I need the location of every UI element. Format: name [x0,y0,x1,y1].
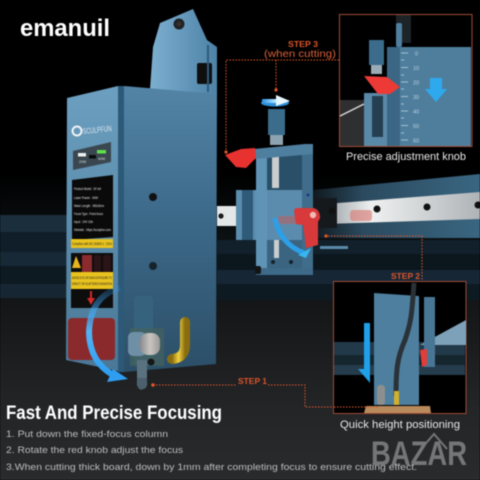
instruction text block: 3.When cutting thick board, down by 1mm after completing focus to ensure cutting effect. [6,462,417,473]
icon: blue down arrow [425,78,447,102]
blue rotate arrow on body [89,288,128,382]
callout: step 1: STEP 1 [238,376,267,386]
logo: SCULPFUN [72,124,112,136]
red knob and blue rotate arrow on carriage [275,208,320,258]
icon: blue rotate arrow on knob [261,95,290,106]
gantry beam with linear rail [217,174,480,240]
power switch panel: 20W [79,160,87,164]
top adjustment knob [243,109,313,159]
extrusion rails background [0,215,480,300]
ruler scale: 60 [413,138,419,144]
warning labels [71,253,113,308]
spec label [72,175,113,240]
ruler scale: 50 [413,124,419,130]
spec label: Website : https://sculpfun.com [74,227,111,232]
gold handle [172,322,185,359]
spec label: Laser Power : 40W [74,195,98,200]
heading: Fast And Precise Focusing [6,402,222,424]
yellow compliance strip [71,239,113,248]
icon: red adjustment knob [364,76,400,94]
icon: blue down arrow [358,323,370,383]
warning labels: DIRECT OR SCATTERED RADIATION [72,282,112,286]
ruler scale: 40 [413,110,419,116]
spec label: Focus Type : Fixed-focus [74,211,103,216]
caption: quick height positioning: Quick height positioning [340,419,460,431]
spec label: Input : 24V 10A [74,219,93,224]
ruler scale: 0 [415,52,418,58]
panel: quick height positioning [334,282,466,414]
laser module body [66,86,217,372]
spec label: Wave Length : 450±5nm [74,203,104,208]
vertical slide carriage [255,152,348,275]
instruction text block [6,429,417,473]
panel: precise adjustment knob [340,14,472,146]
warning labels: AVOID EYE OR SKIN EXPOSURE TO [72,276,112,280]
brand text: emanuil: emanuil [20,15,110,42]
spec label: Product Model : SF-A9 [74,186,102,191]
power switch panel: 40W [98,157,106,161]
callout: step 3: STEP 3 [288,39,318,49]
power switch panel [73,142,111,170]
callout: step 3: (when cutting) [264,49,336,60]
focus bracket and knob [128,296,164,390]
ruler scale [401,52,419,144]
red window [68,318,115,360]
caption: precise adjustment knob: Precise adjustment knob [346,151,466,163]
yellow compliance strip: Complies with IEC 60825-1 : 2014 [72,242,112,246]
callout: step 1 [151,376,333,407]
instruction text block: 1. Put down the fixed-focus column [6,429,168,440]
instruction text block: 2. Rotate the red knob adjust the focus [6,445,183,456]
callout: step 3 [224,39,339,154]
fin: top bracket of laser module [150,9,217,95]
callout: step 2: STEP 2 [391,271,420,281]
logo: SCULPFUN: SCULPFUN [82,124,112,136]
ruler scale: 10 [413,66,419,72]
ruler scale: 20 [413,80,419,86]
callout: step 2 [324,234,422,281]
icon: red height lever [225,148,256,168]
ruler scale: 30 [413,95,419,101]
